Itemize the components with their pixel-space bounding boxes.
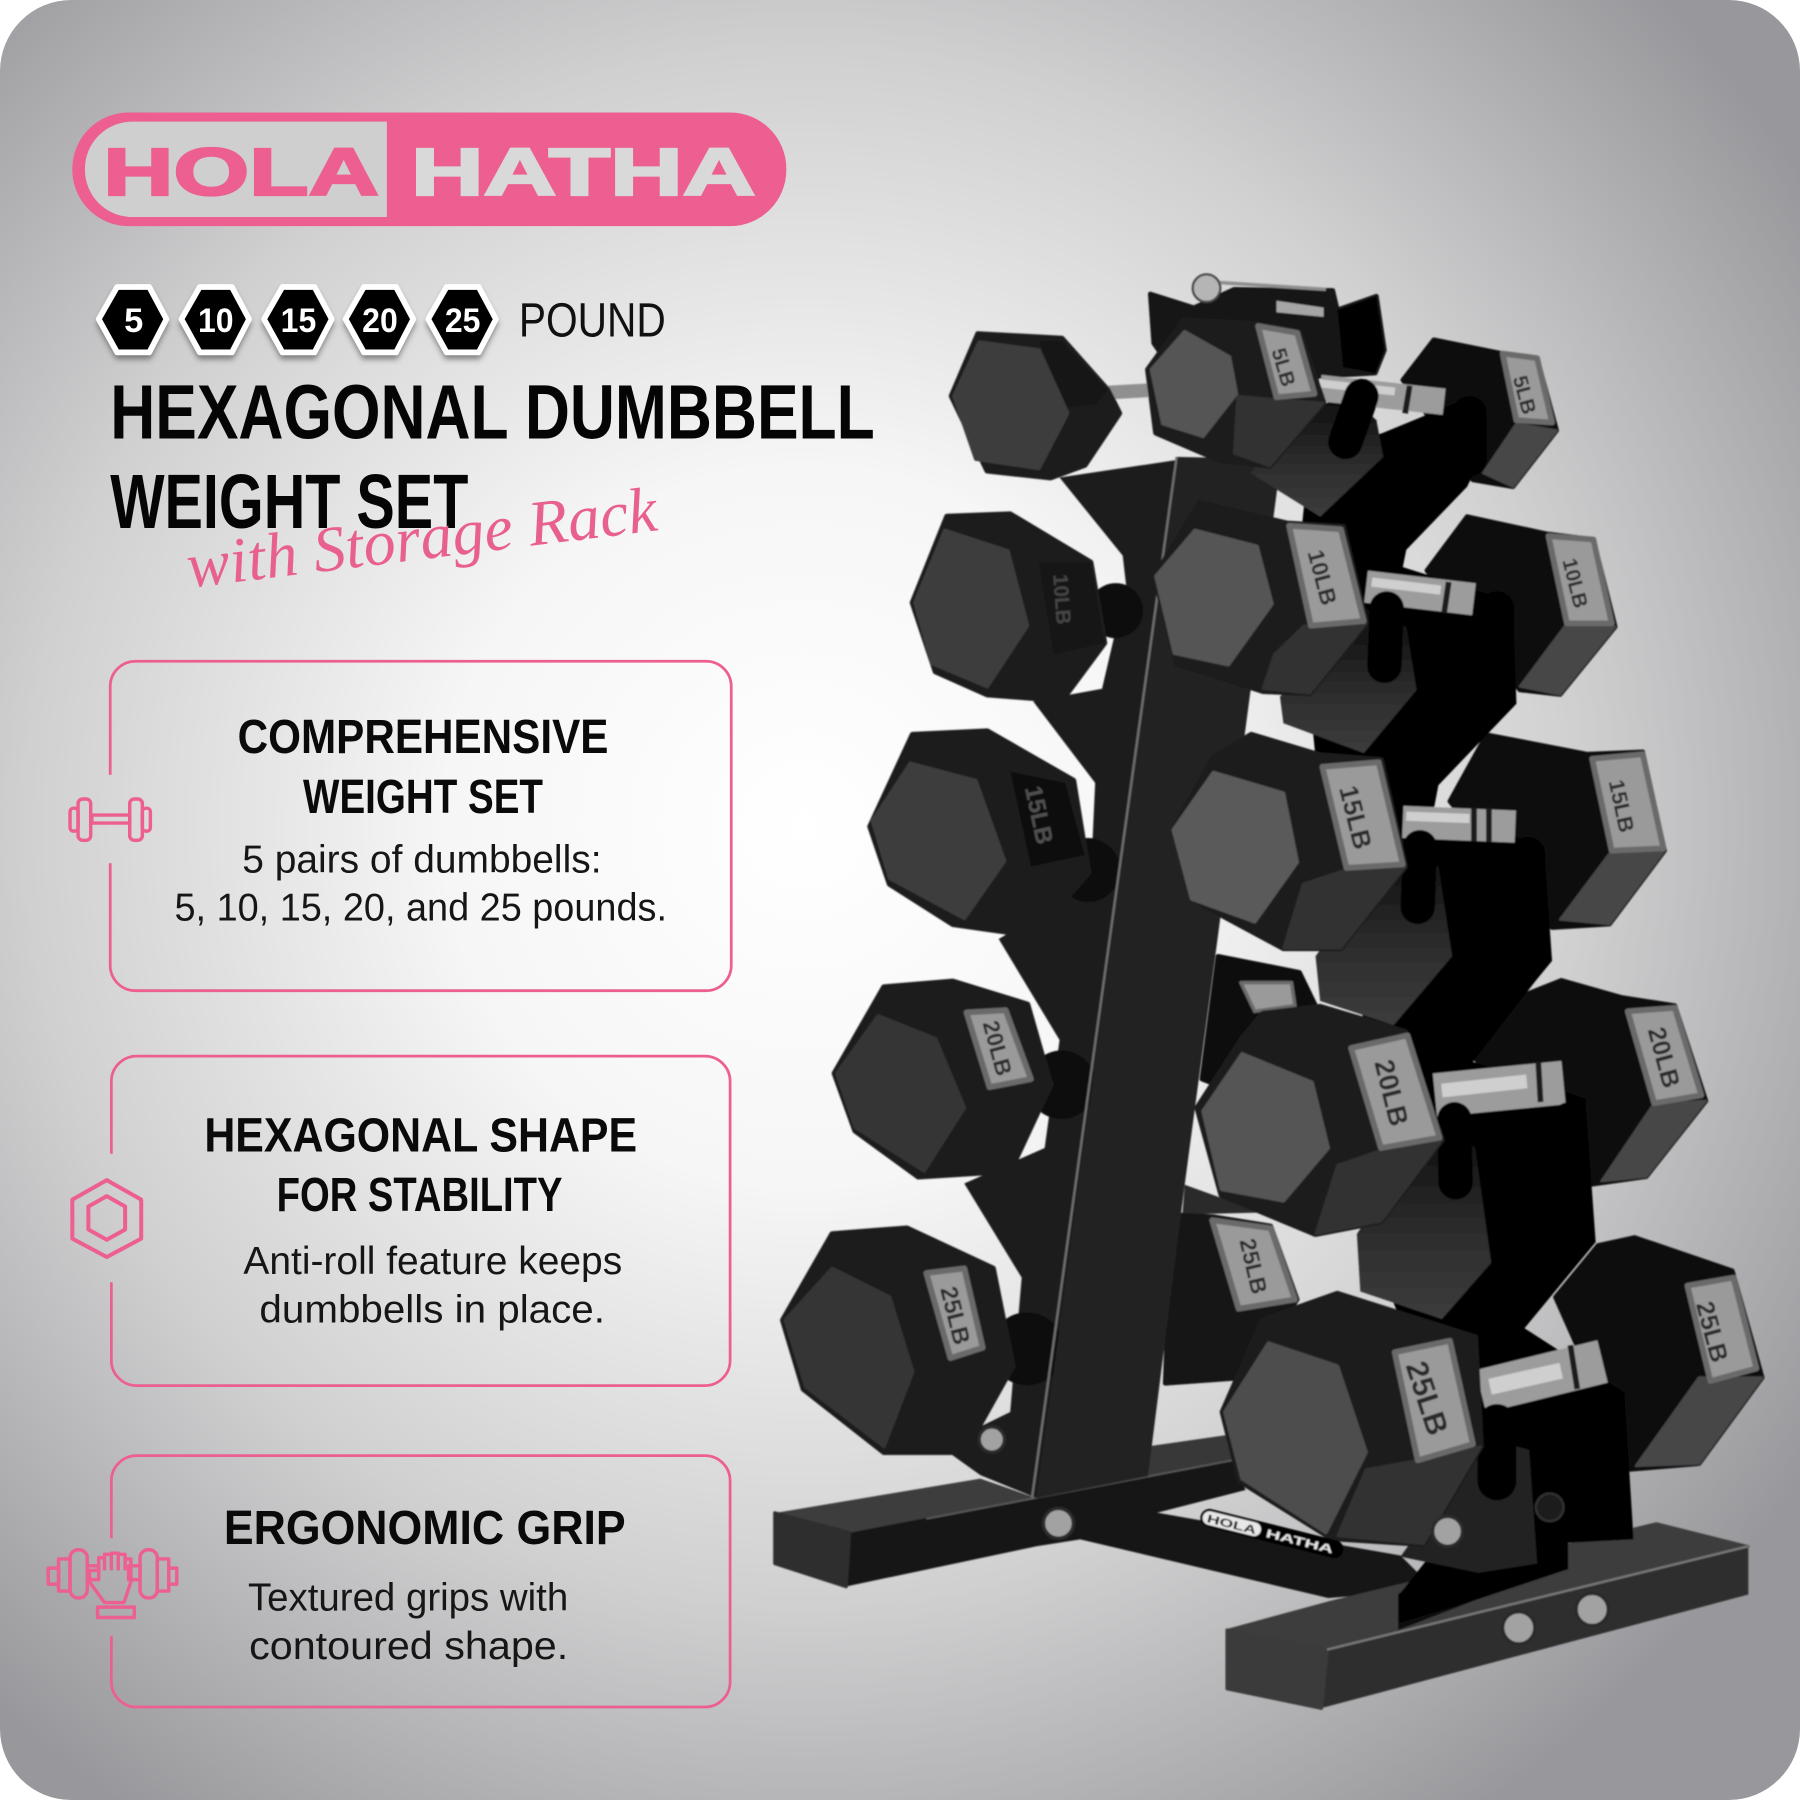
base beams	[775, 1435, 1748, 1708]
dumbbell: 15LB front	[1173, 735, 1405, 948]
dumbbell: 25LB rear	[1165, 1215, 1297, 1383]
weight badges row	[96, 287, 498, 359]
dumbbell: 10LB right	[1427, 517, 1615, 695]
right column dumbbells	[1403, 340, 1762, 1469]
center beam	[1080, 1500, 1435, 1598]
chrome handles	[1320, 383, 1603, 1391]
icon: hand gripping dumbbell	[48, 1550, 177, 1617]
rear prongs over handles	[1469, 413, 1604, 1515]
script subtitle: with Storage Rack	[182, 473, 662, 602]
left plate	[940, 459, 1182, 1498]
panel: hexagonal shape	[72, 1056, 730, 1386]
body text	[243, 1240, 622, 1331]
badge: 5: 5	[124, 302, 143, 340]
title: HEXAGONAL DUMBBELL	[110, 370, 875, 456]
heading: WEIGHT SET	[303, 770, 543, 824]
heading: FOR STABILITY	[277, 1168, 562, 1222]
brand tag on rack: HATHA	[1265, 1528, 1334, 1556]
front prongs over handles	[1345, 396, 1497, 1481]
handle: 20LB	[1435, 1062, 1564, 1102]
front plate lobes	[1250, 390, 1537, 1573]
pound label: POUND	[519, 293, 666, 347]
brand tag on rack	[1198, 1507, 1345, 1560]
heading: ERGONOMIC GRIP	[224, 1501, 626, 1555]
badge: 20: 20	[362, 302, 398, 340]
badge: 10: 10	[198, 302, 234, 340]
heading	[204, 1108, 637, 1222]
heading: COMPREHENSIVE	[238, 710, 608, 764]
body text: 5, 10, 15, 20, and 25 pounds.	[174, 887, 667, 930]
dumbbell: 20LB front	[1197, 1007, 1442, 1234]
badge: 15	[262, 287, 334, 359]
dumbbell: 25LB right	[1555, 1238, 1762, 1469]
badge: 25	[426, 287, 498, 359]
handle: 5LB	[1320, 383, 1444, 413]
brand tag on rack: HOLA	[1205, 1513, 1257, 1537]
central post	[979, 457, 1281, 1538]
handle: 10LB	[1366, 582, 1474, 613]
dumbbell: 20LB left: 20LB	[978, 1018, 1017, 1079]
rear section of left beam	[1148, 1435, 1233, 1479]
dumbbell: 10LB left: 10LB	[1048, 573, 1075, 625]
body text: contoured shape.	[249, 1625, 568, 1668]
dumbbell: 10LB front: 10LB	[1303, 547, 1342, 608]
dumbbell: 10LB right: 10LB	[1557, 556, 1592, 611]
rear crossbar	[1182, 1185, 1274, 1215]
heading: HEXAGONAL SHAPE	[204, 1108, 637, 1162]
product: dumbbell rack	[775, 274, 1762, 1708]
title: WEIGHT SET	[110, 459, 468, 545]
left handle stubs	[991, 390, 1148, 1386]
logo: Hola Hatha: HATHA	[411, 136, 755, 210]
dumbbell: 20LB rear	[1202, 956, 1316, 1085]
body text: Anti-roll feature keeps	[243, 1240, 622, 1283]
badge: 10	[179, 287, 251, 359]
right beam	[1227, 1523, 1748, 1708]
body text	[248, 1577, 568, 1668]
dumbbell: 20LB front: 20LB	[1368, 1056, 1415, 1129]
dumbbell: 15LB right: 15LB	[1604, 777, 1639, 835]
logo: Hola Hatha	[72, 112, 786, 226]
dumbbell: 15LB left: 15LB	[1019, 784, 1058, 847]
front column dumbbells	[1148, 320, 1481, 1544]
rack bolts	[1433, 1493, 1564, 1546]
panel: comprehensive weight set	[70, 661, 731, 991]
dumbbell: 15LB front: 15LB	[1333, 782, 1378, 852]
dumbbell: 15LB right	[1450, 735, 1665, 928]
handle: 25LB	[1481, 1345, 1603, 1391]
rear dumbbells behind post	[1165, 956, 1316, 1383]
dumbbell: 5LB right	[1403, 340, 1557, 487]
heading	[238, 710, 608, 824]
rear black plates	[1297, 397, 1634, 1623]
icon: hexagon	[72, 1180, 141, 1257]
dumbbell: 5LB front: 5LB	[1267, 346, 1299, 389]
body text	[174, 838, 667, 930]
logo: Hola Hatha: HOLA	[103, 136, 379, 210]
dumbbell: 20LB right	[1475, 980, 1706, 1185]
left column dumbbells	[783, 334, 1119, 1452]
dumbbell: 5LB right: 5LB	[1508, 373, 1540, 417]
body text: dumbbells in place.	[259, 1288, 605, 1331]
badge: 15: 15	[281, 302, 316, 340]
icon: dumbbell	[70, 799, 150, 840]
left beam	[775, 1460, 1246, 1586]
body text: Textured grips with	[248, 1577, 568, 1620]
badge: 5	[96, 287, 169, 359]
handle: 15LB	[1403, 808, 1515, 841]
badge: 25: 25	[445, 302, 480, 340]
body text: 5 pairs of dumbbells:	[242, 838, 602, 881]
dumbbell: 5LB front	[1148, 320, 1324, 466]
dumbbell: 20LB left	[835, 982, 1050, 1177]
rack top bracket	[1150, 274, 1384, 385]
dumbbell: 25LB front	[1223, 1294, 1481, 1544]
badge: 20	[343, 287, 416, 359]
panel: ergonomic grip	[48, 1456, 730, 1707]
title	[110, 370, 875, 545]
dumbbell: 25LB left: 25LB	[934, 1284, 975, 1348]
dumbbell: 5LB left	[952, 334, 1119, 478]
dumbbell: 15LB left	[870, 731, 1088, 936]
dumbbell: 25LB rear: 25LB	[1235, 1236, 1273, 1296]
dumbbell: 25LB right: 25LB	[1690, 1298, 1733, 1365]
dumbbell: 20LB right: 20LB	[1642, 1024, 1685, 1091]
dumbbell: 10LB left	[913, 514, 1104, 700]
dumbbell: 25LB front: 25LB	[1399, 1357, 1455, 1440]
dumbbell: 10LB front	[1155, 503, 1366, 693]
dumbbell: 25LB left	[783, 1228, 1012, 1452]
